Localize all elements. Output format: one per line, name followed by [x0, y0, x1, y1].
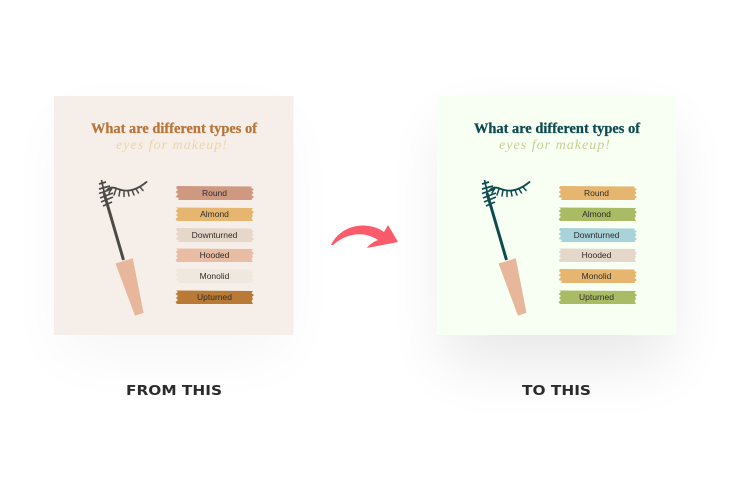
swatch: Round	[176, 186, 254, 200]
swatch: Monolid: Monolid	[200, 271, 230, 281]
panel: to this	[437, 96, 676, 335]
swatch: Hooded	[558, 248, 637, 262]
swatch: Downturned	[176, 228, 254, 242]
swatch: Round: Round	[202, 188, 227, 198]
heading: right title: What are different types of	[474, 121, 640, 137]
shadow: left panel	[60, 120, 285, 355]
swatch: Hooded: Hooded	[200, 250, 230, 260]
swatch: Monolid	[558, 269, 637, 283]
swatch: Upturned	[558, 290, 637, 304]
script subtitle: right: eyes for makeup!	[499, 138, 611, 153]
swatch: Round: Round	[584, 188, 609, 198]
swatch: Almond: Almond	[200, 209, 229, 219]
arrow	[331, 225, 398, 248]
swatch: Downturned: Downturned	[192, 230, 238, 240]
panel: from this	[54, 96, 294, 335]
swatch: Upturned: Upturned	[197, 292, 232, 302]
swatch: Almond	[558, 208, 637, 221]
icon: mascara wand, right	[482, 180, 526, 316]
swatch: Almond	[176, 208, 254, 221]
swatch: Monolid	[176, 269, 254, 283]
icon: closed eye lashes, left	[107, 182, 146, 196]
icon: mascara wand, left	[99, 180, 144, 316]
swatch: Round	[558, 186, 637, 200]
heading: left title: What are different types of	[91, 121, 257, 137]
swatch: Hooded	[176, 248, 254, 262]
shadow: right panel	[445, 125, 670, 365]
swatch: Monolid: Monolid	[582, 271, 612, 281]
swatch: Upturned: Upturned	[579, 292, 614, 302]
swatch: Hooded: Hooded	[582, 250, 612, 260]
swatch: Downturned	[558, 228, 637, 242]
caption: to this: TO THIS	[522, 383, 591, 399]
swatch: Almond: Almond	[582, 209, 611, 219]
caption: from this: FROM THIS	[126, 383, 222, 399]
icon: closed eye lashes, right	[490, 182, 530, 196]
swatch: Downturned: Downturned	[574, 230, 620, 240]
swatch: Upturned	[176, 290, 254, 304]
script subtitle: left: eyes for makeup!	[116, 138, 228, 153]
